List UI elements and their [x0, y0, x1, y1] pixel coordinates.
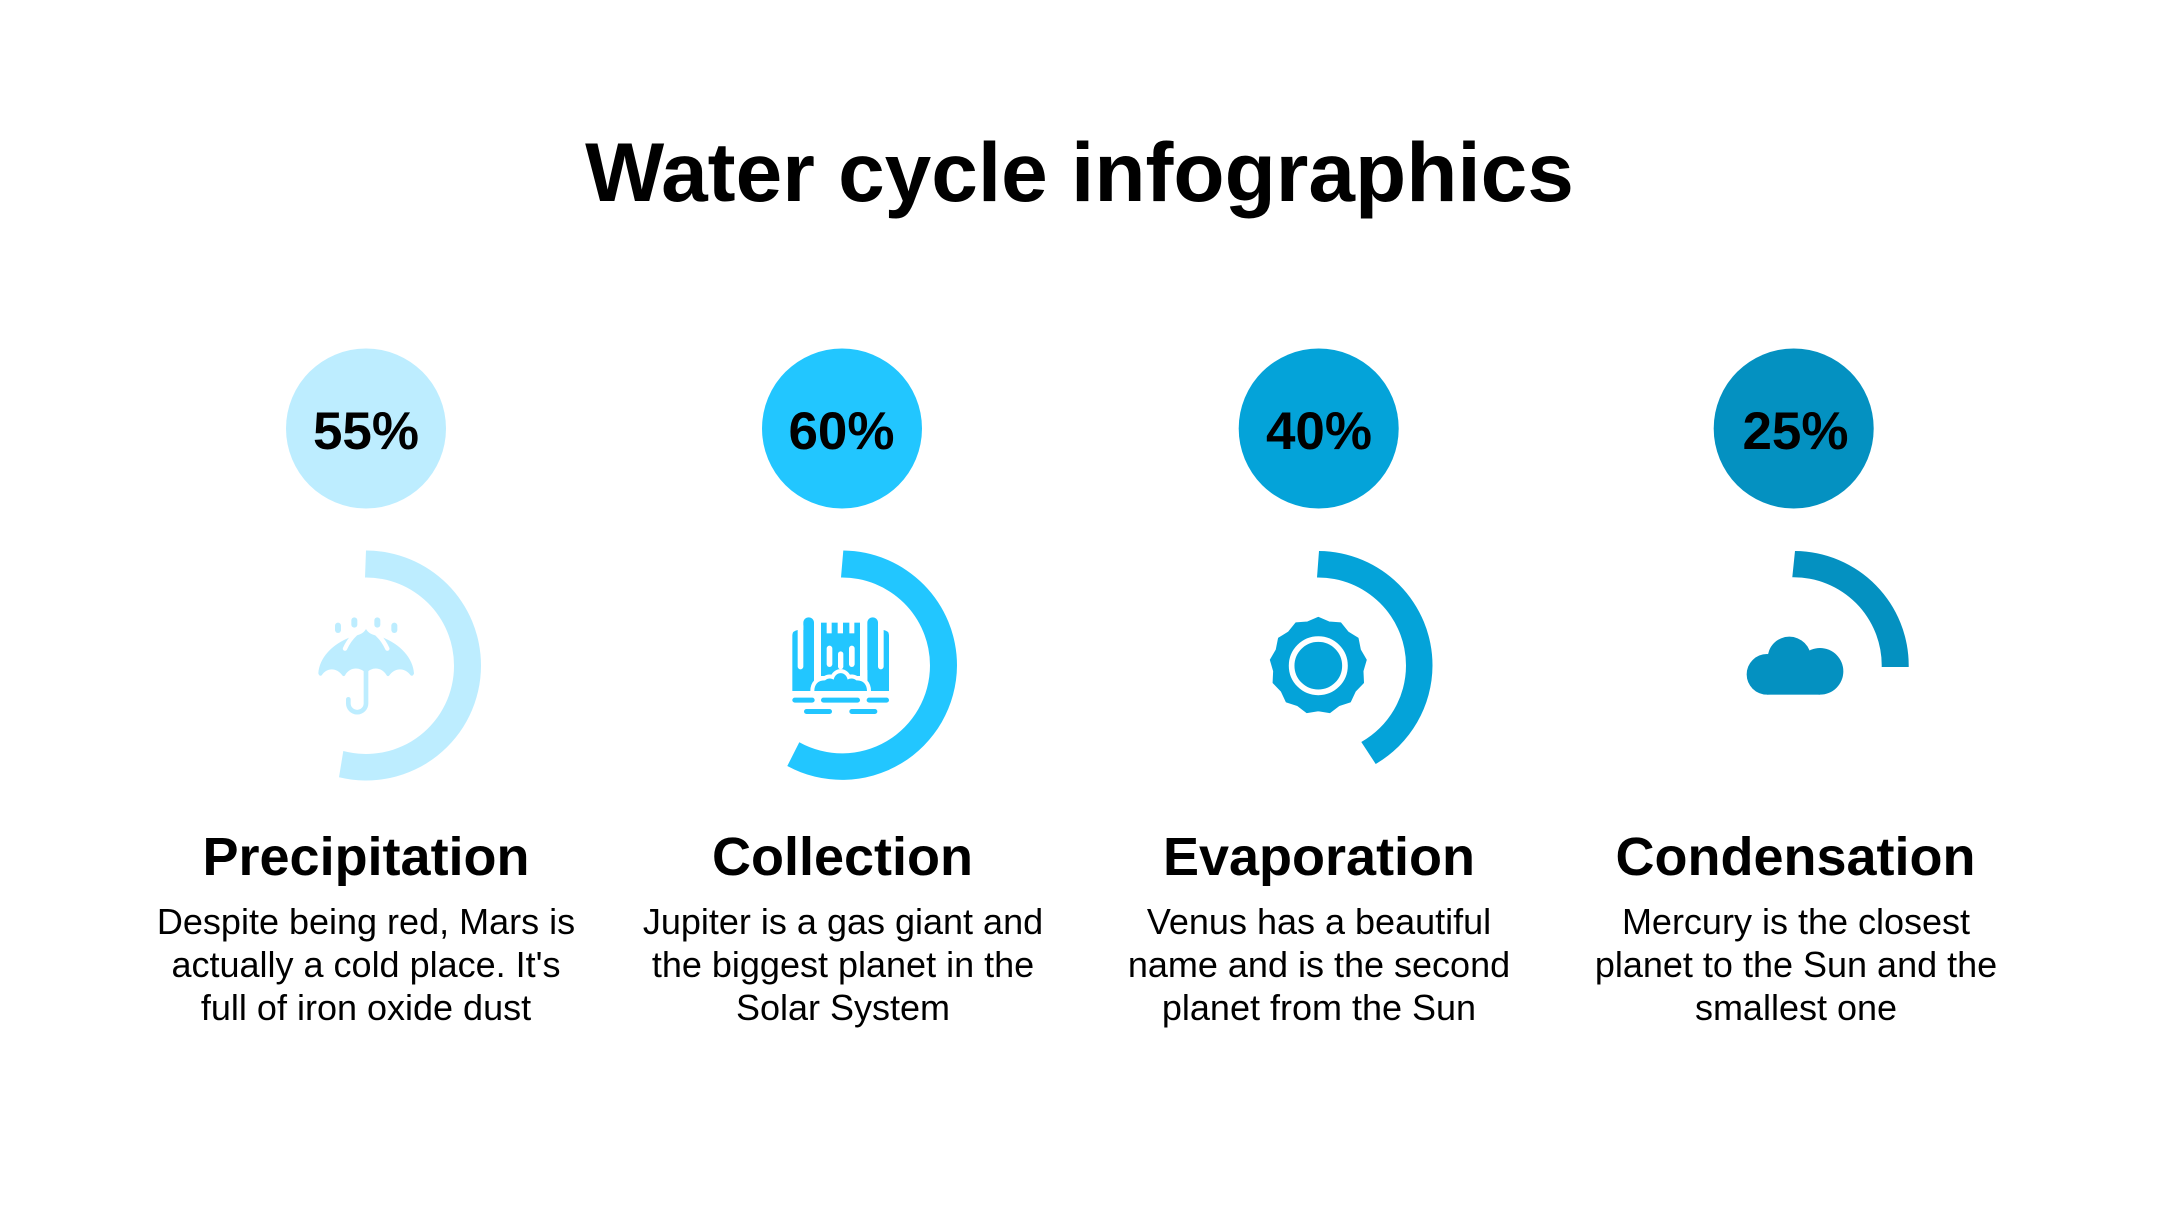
percentage badge: 40%: 40%: [1266, 402, 1372, 461]
percentage badge: 55%: [286, 348, 446, 508]
progress arc: 25%: [1792, 551, 1909, 667]
progress arc: 60%: [787, 550, 957, 780]
icon: cloud: [1747, 637, 1843, 695]
heading: Precipitation: Precipitation: [202, 827, 530, 887]
heading: Condensation: Condensation: [1616, 827, 1976, 887]
progress arc: 40%: [1317, 551, 1432, 764]
title: Water cycle infographics: [585, 125, 1574, 219]
text block: collection description: Solar System: [736, 987, 950, 1028]
text block: collection description: the biggest planet in the: [652, 944, 1034, 985]
panel: collection: [643, 348, 1043, 1028]
percentage badge: 25%: [1714, 348, 1874, 508]
text block: evaporation description: Venus has a beautiful: [1147, 901, 1491, 942]
text block: precipitation description: actually a cold place. It's: [171, 944, 561, 985]
percentage badge: 25%: 25%: [1742, 402, 1849, 461]
icon: sun: [1270, 617, 1366, 713]
text block: condensation description: planet to the Sun and the: [1595, 944, 1997, 985]
text block: precipitation description: full of iron oxide dust: [201, 987, 531, 1028]
icon: waterfall: [785, 617, 898, 714]
text block: evaporation description: name and is the second: [1128, 944, 1510, 985]
panel: evaporation: [1128, 348, 1510, 1028]
text block: condensation description: smallest one: [1695, 987, 1897, 1028]
panel: condensation: [1595, 348, 1997, 1028]
text block: condensation description: Mercury is the closest: [1622, 901, 1970, 942]
icon: umbrella with rain: [318, 617, 414, 712]
progress arc: 55%: [339, 550, 481, 781]
text block: collection description: Jupiter is a gas giant and: [643, 901, 1043, 942]
panel: precipitation: [157, 348, 575, 1028]
text block: evaporation description: planet from the Sun: [1162, 987, 1476, 1028]
heading: Collection: Collection: [712, 827, 973, 887]
text block: precipitation description: Despite being red, Mars is: [157, 901, 575, 942]
percentage badge: 40%: [1239, 348, 1399, 508]
percentage badge: 60%: 60%: [788, 402, 895, 461]
heading: Evaporation: Evaporation: [1163, 827, 1475, 887]
percentage badge: 60%: [762, 348, 922, 508]
percentage badge: 55%: 55%: [313, 402, 419, 461]
